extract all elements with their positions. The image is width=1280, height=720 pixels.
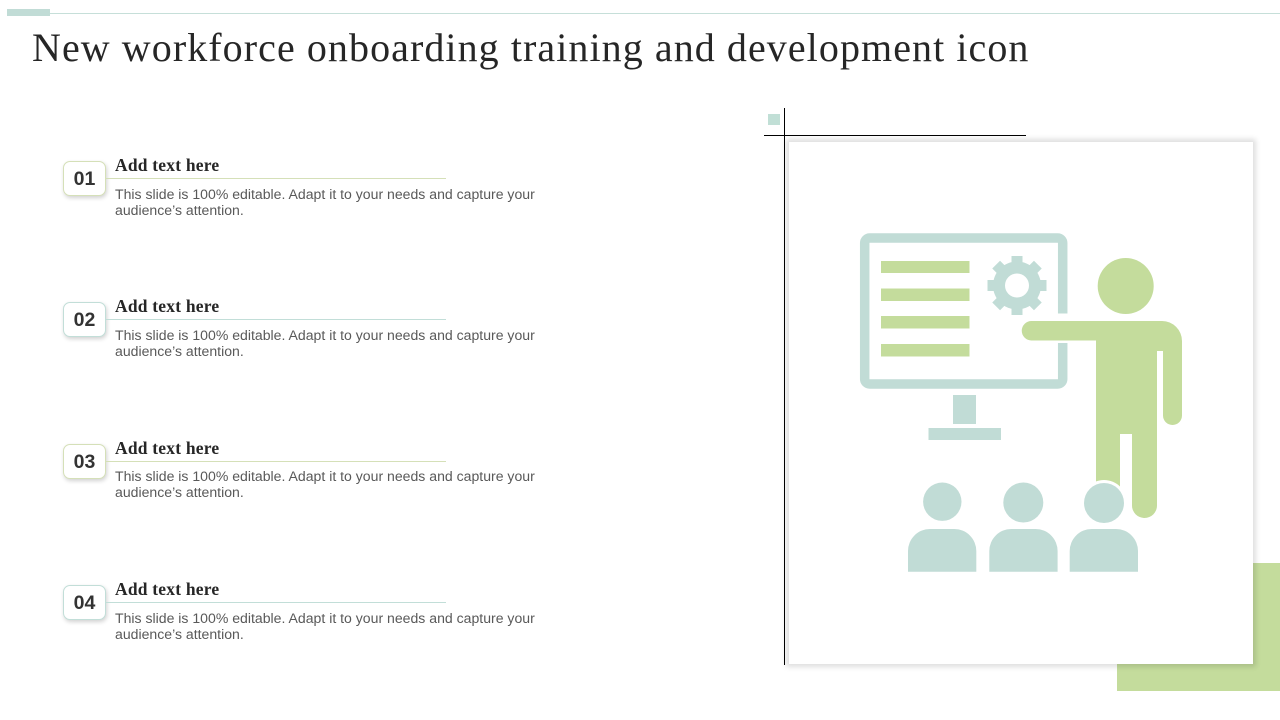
number 02	[63, 302, 106, 337]
header accent bar	[7, 9, 50, 16]
number 03: 03	[74, 451, 95, 473]
white icon panel	[789, 142, 1253, 664]
text 01: This slide is 100% editable. Adapt it to your needs and capture your audience’s attention.	[115, 186, 535, 218]
text 03: This slide is 100% editable. Adapt it to your needs and capture your audience’s attention.	[115, 468, 535, 500]
text 04: This slide is 100% editable. Adapt it to your needs and capture your audience’s attention.	[115, 610, 535, 642]
number 03	[63, 444, 106, 479]
heading 03: Add text here	[115, 438, 219, 458]
number 04	[63, 585, 106, 620]
item 04	[62, 579, 535, 642]
horizontal black line	[764, 135, 1026, 136]
icon: slide text bars	[881, 261, 970, 356]
teal square accent	[768, 114, 780, 125]
number 02: 02	[74, 309, 95, 331]
number 01: 01	[74, 168, 95, 190]
item 01	[62, 155, 535, 218]
item 02	[62, 296, 535, 359]
icon: presenter figure	[1022, 258, 1182, 518]
icon: gear	[988, 256, 1046, 315]
heading 04: Add text here	[115, 579, 219, 599]
green corner block	[1117, 563, 1280, 691]
title: New workforce onboarding training and development icon	[32, 25, 1030, 70]
text 02: This slide is 100% editable. Adapt it to your needs and capture your audience’s attention.	[115, 327, 535, 359]
header rule	[50, 13, 1280, 14]
number 04: 04	[74, 592, 95, 614]
heading 01: Add text here	[115, 155, 219, 175]
item 03	[62, 438, 535, 500]
vertical black line	[784, 108, 785, 665]
icon: monitor	[865, 238, 1070, 440]
heading 02: Add text here	[115, 296, 219, 316]
icon: audience	[908, 480, 1138, 572]
number 01	[63, 161, 106, 196]
